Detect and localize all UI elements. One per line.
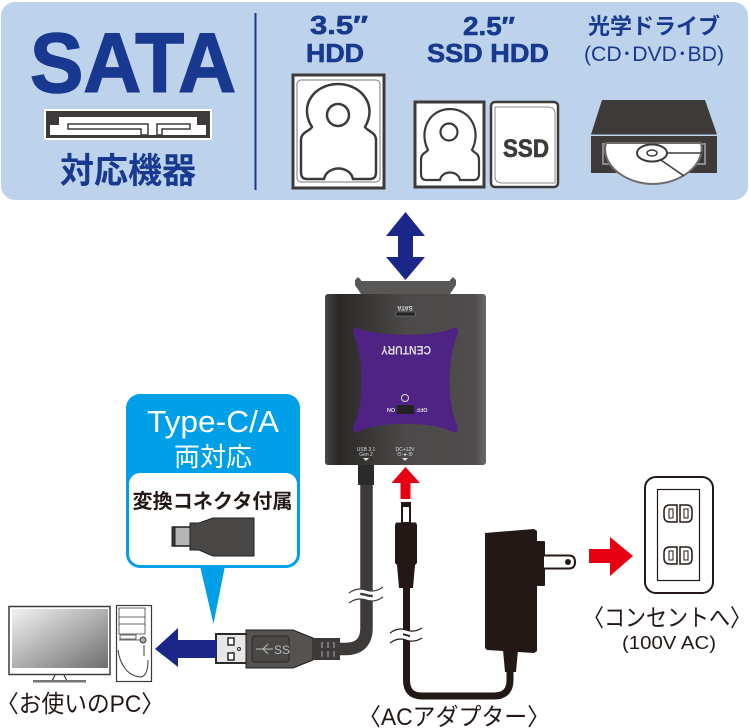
- power switch: OFF: [416, 406, 428, 412]
- port: SATA: SATA: [397, 304, 413, 310]
- label: 3.5 inch HDD: 3.5″: [310, 10, 368, 40]
- port labels: USB 3.1: [357, 447, 376, 453]
- icon: optical drive: [591, 100, 717, 184]
- port labels: ⊖-●-⊕: [397, 452, 413, 458]
- port labels: DC+12V: [395, 447, 415, 453]
- USB plug: [216, 630, 340, 668]
- label: 2.5 inch SSD HDD: [427, 11, 549, 68]
- port: SATA: [396, 304, 416, 316]
- icon: 3.5 inch HDD: [293, 75, 384, 188]
- USB cable: [330, 465, 383, 649]
- arrow: to outlet: [589, 537, 633, 576]
- label: optical drive: 光学ドライブ: [588, 14, 720, 39]
- callout title: Type-C/A: [147, 404, 279, 439]
- label: 100V AC: (100V AC): [622, 633, 716, 653]
- device: SATA adapter: [325, 277, 486, 465]
- label: 3.5 inch HDD: [306, 10, 368, 68]
- arrow: SATA connection: [386, 212, 425, 280]
- logo: CENTURY: CENTURY: [381, 343, 431, 357]
- icon: PC: [9, 606, 152, 682]
- heading: compatible devices: 対応機器: [60, 152, 196, 191]
- divider: [254, 13, 256, 190]
- icon: 2.5 inch SSD: [491, 102, 558, 187]
- label: 2.5 inch SSD HDD: 2.5″: [463, 11, 515, 41]
- arrow: DC input: [392, 467, 420, 499]
- label: optical drive: (CD･DVD･BD): [584, 43, 724, 66]
- SATA plug: [355, 277, 456, 294]
- callout: Type-C/A: [126, 394, 300, 624]
- DC plug and cable: [390, 503, 510, 696]
- arrow: to PC: [155, 628, 216, 667]
- USB plug: SS: [274, 643, 290, 657]
- purple panel: [353, 328, 458, 433]
- callout text: 変換コネクタ付属: [132, 490, 292, 513]
- AC adapter: [485, 529, 575, 672]
- power switch: [387, 394, 428, 414]
- label: optical drive: [584, 14, 724, 66]
- icon: 2.5 inch SSD: SSD: [503, 135, 549, 163]
- icon: conversion connector: [172, 518, 254, 556]
- label: 3.5 inch HDD: HDD: [306, 38, 364, 68]
- label: 2.5 inch SSD HDD: SSD HDD: [427, 38, 549, 68]
- port labels: Gen 2: [359, 452, 373, 458]
- port labels: [357, 447, 415, 461]
- icon: 2.5 inch HDD: [415, 102, 484, 187]
- power switch: ON: [387, 406, 395, 412]
- icon: SATA connector: [44, 109, 212, 140]
- panel: SATA compatible devices: [1, 2, 748, 200]
- heading: SATA: SATA: [30, 16, 236, 110]
- callout subtitle: 両対応: [174, 442, 252, 472]
- label: your PC: 〈お使いのPC〉: [0, 691, 164, 718]
- icon: wall outlet: [645, 477, 713, 593]
